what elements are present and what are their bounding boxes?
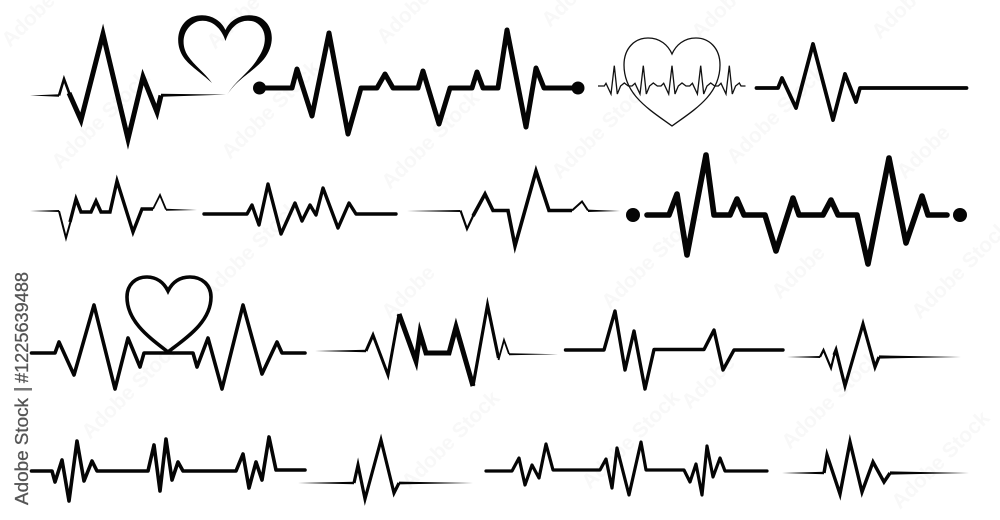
heart outline: [624, 38, 720, 126]
line 5: [204, 184, 396, 234]
faint watermark tiles: Adobe Stock: [377, 86, 485, 194]
faint watermark tiles: Adobe: [677, 351, 740, 414]
faint watermark tiles: Adobe Stock: [47, 66, 155, 174]
stock credit vertical text: [12, 272, 32, 505]
faint watermark tiles: Adobe Stock: [547, 76, 655, 184]
line 2 with end dots: [253, 30, 584, 134]
faint watermark tiles: Adobe Stock: [397, 386, 505, 494]
line 4: [30, 181, 197, 238]
faint watermark tiles: Adobe Stock: [197, 196, 305, 304]
faint watermark tiles: Adobe: [767, 241, 830, 304]
faint watermark tiles: Adobe Stock: [887, 406, 995, 514]
line 6: [407, 171, 620, 246]
stock credit vertical text: Adobe Stock: [12, 397, 32, 505]
ECG trace: [598, 66, 746, 94]
line 14: [486, 442, 767, 495]
faint watermark tiles: Adobe Stock: [597, 206, 705, 314]
open heart: [178, 15, 272, 95]
line 1 with open heart: [30, 15, 272, 139]
heart outline: [127, 277, 211, 352]
line 11: [787, 324, 961, 386]
stock credit vertical text: #1225639488: [12, 272, 32, 383]
line 9: [315, 305, 558, 386]
line 8 with heart on baseline: [32, 277, 305, 389]
line 15: [782, 442, 969, 494]
faint watermark tiles: Adobe Stock: [777, 346, 885, 454]
line 10: [566, 311, 783, 389]
faint watermark tiles: Adobe: [892, 121, 955, 184]
thin outline heart with ECG: [598, 38, 746, 126]
line 13: [298, 440, 473, 499]
faint watermark tiles: Adobe Stock: [722, 61, 830, 169]
line 12: [32, 437, 305, 501]
line 7 with end dots: [626, 155, 967, 264]
faint watermark tiles: Adobe: [377, 261, 440, 324]
faint watermark tiles: Adobe Stock: [77, 336, 185, 444]
faint watermark tiles: Adobe Stock: [217, 56, 325, 164]
faint watermark tiles: Adobe Stock: [577, 386, 685, 494]
line 3: [756, 44, 966, 120]
